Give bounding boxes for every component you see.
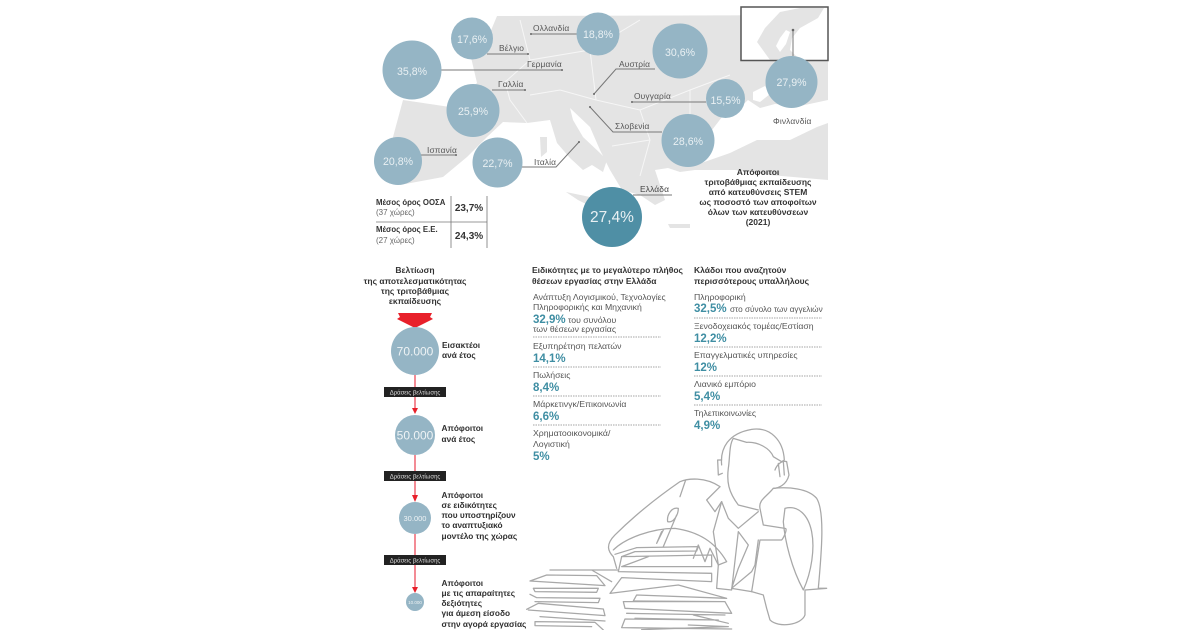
panel: sectors: 12% [694,362,717,374]
connector lines and country labels: Αυστρία [619,59,650,69]
map bubbles: country percentages: 15,5% [710,95,741,107]
map bubbles: country percentages: 28,6% [673,136,704,148]
funnel: improvement tags: Δράσεις βελτίωσης [390,557,440,564]
funnel heading: εκπαίδευσης [389,296,442,306]
map bubbles: country percentages: 25,9% [458,106,489,118]
panel: specialties: 8,4% [533,382,559,394]
panel: sectors: Λιανικό εμπόριο [694,379,756,389]
averages table: 23,7% [455,203,483,214]
panel: sectors: Επαγγελματικές υπηρεσίες [694,350,798,360]
funnel heading: της τριτοβάθμιας [381,286,450,296]
averages table [376,196,487,248]
panel: sectors: Κλάδοι που αναζητούν [694,265,787,275]
connector lines and country labels: Ιταλία [534,157,556,167]
averages table: (27 χώρες) [376,236,415,245]
panel: sectors [694,265,823,432]
funnel: stage labels: Απόφοιτοι [442,490,484,500]
funnel: stage labels: το αναπτυξιακό [442,520,503,530]
panel: specialties: Ειδικότητες με το μεγαλύτερο πλήθος [532,265,684,275]
map title: (2021) [746,217,770,227]
panel: specialties: Ανάπτυξη Λογισμικού, Τεχνολογίες [533,292,666,302]
illustration: stressed man at desk with papers [527,429,827,630]
map title: τριτοβάθμιας εκπαίδευσης [705,177,812,187]
funnel: red arrow [397,313,433,328]
averages table: (37 χώρες) [376,208,415,217]
funnel: circles: 10.000 [408,600,422,605]
map bubbles: country percentages: 30,6% [665,47,696,59]
map inset: Northern Europe [741,7,828,60]
panel: specialties: 5% [533,451,550,463]
funnel: circles: 70.000 [397,344,434,358]
map title: από κατευθύνσεις STEM [709,187,807,197]
map bubbles: country percentages: 20,8% [383,156,414,168]
connector lines and country labels: Ισπανία [427,145,457,155]
panel: specialties: Λογιστική [533,439,570,449]
map bubbles: country percentages: 35,8% [397,66,428,78]
map title: όλων των κατευθύνσεων [708,207,808,217]
panel: sectors: Πληροφορική [694,292,746,302]
panel: specialties: Πωλήσεις [533,370,570,380]
panel: sectors: 4,9% [694,420,720,432]
funnel: stage labels: στην αγορά εργασίας [442,619,526,629]
connector lines and country labels: Γαλλία [498,79,523,89]
connector lines and country labels: Βέλγιο [499,43,524,53]
funnel: stage labels: Απόφοιτοι [442,578,484,588]
funnel heading: της αποτελεσματικότητας [364,276,467,286]
map title [699,167,817,227]
panel: specialties: Εξυπηρέτηση πελατών [533,341,622,351]
map bubbles: country percentages: 17,6% [457,34,488,46]
funnel: improvement tags: Δράσεις βελτίωσης [390,389,440,396]
funnel heading [364,265,467,306]
funnel: stage labels: για άμεση είσοδο [442,608,510,618]
funnel: stage labels: Εισακτέοι [442,340,481,350]
funnel: stage labels: ανά έτος [442,434,475,444]
funnel: stage labels [442,340,526,629]
map title: Απόφοιτοι [737,167,780,177]
map bubbles: country percentages: 22,7% [482,158,513,170]
panel: specialties: Μάρκετινγκ/Επικοινωνία [533,399,626,409]
funnel: circles: 30.000 [404,514,426,523]
funnel: stage labels: Απόφοιτοι [442,423,484,433]
connector lines and country labels: Ελλάδα [640,184,669,194]
funnel: improvement tags [384,387,446,565]
funnel heading: Βελτίωση [395,265,435,275]
map bubbles: country percentages: 27,4% [590,209,634,226]
map title: ως ποσοστό των αποφοίτων [699,197,817,207]
connector lines and country labels: Γερμανία [527,59,562,69]
panel: sectors: περισσότερους υπαλλήλους [694,276,810,286]
map bubbles: country percentages: 27,9% [776,77,807,89]
panel: specialties: Χρηματοοικονομικά/ [533,428,611,438]
panel: specialties: του συνόλου [568,315,616,325]
map bubbles: country percentages: 18,8% [583,29,614,41]
connector lines and country labels: Φινλανδία [773,116,812,126]
panel: specialties: Πληροφορικής και Μηχανική [533,302,642,312]
funnel: circles: 50.000 [397,428,434,442]
panel: sectors: Τηλεπικοινωνίες [694,408,756,418]
funnel: improvement tags: Δράσεις βελτίωσης [390,473,440,480]
panel: specialties [532,265,684,463]
funnel: stage labels: ανά έτος [442,350,476,360]
map bubbles: country percentages [374,12,818,247]
panel: specialties: θέσεων εργασίας στην Ελλάδα [532,276,657,286]
panel: specialties: 14,1% [533,353,566,365]
panel: sectors: 5,4% [694,391,720,403]
funnel: connector arrows [412,375,418,593]
panel: sectors: Ξενοδοχειακός τομέας/Εστίαση [694,321,814,331]
panel: specialties: 32,9% [533,314,566,326]
panel: sectors: 12,2% [694,333,727,345]
funnel: stage labels: δεξιότητες [442,598,482,608]
funnel: stage labels: μοντέλο της χώρας [442,531,517,541]
funnel: stage labels: που υποστηρίζουν [442,510,516,520]
averages table: Μέσος όρος Ε.Ε. [376,225,438,234]
panel: sectors: στο σύνολο των αγγελιών [730,305,823,314]
averages table: 24,3% [455,231,483,242]
map: land of Europe [393,15,828,228]
connector lines and country labels: Ουγγαρία [634,91,671,101]
panel: specialties: των θέσεων εργασίας [533,324,616,334]
funnel: circles [391,327,439,611]
funnel: stage labels: σε ειδικότητες [442,500,497,510]
panel: specialties: 6,6% [533,411,559,423]
connector lines and country labels [421,23,812,195]
panel: sectors: 32,5% [694,303,727,315]
connector lines and country labels: Σλοβενία [615,121,650,131]
averages table: Μέσος όρος ΟΟΣΑ [376,198,446,207]
connector lines and country labels: Ολλανδία [533,23,569,33]
funnel: stage labels: με τις απαραίτητες [442,588,515,598]
